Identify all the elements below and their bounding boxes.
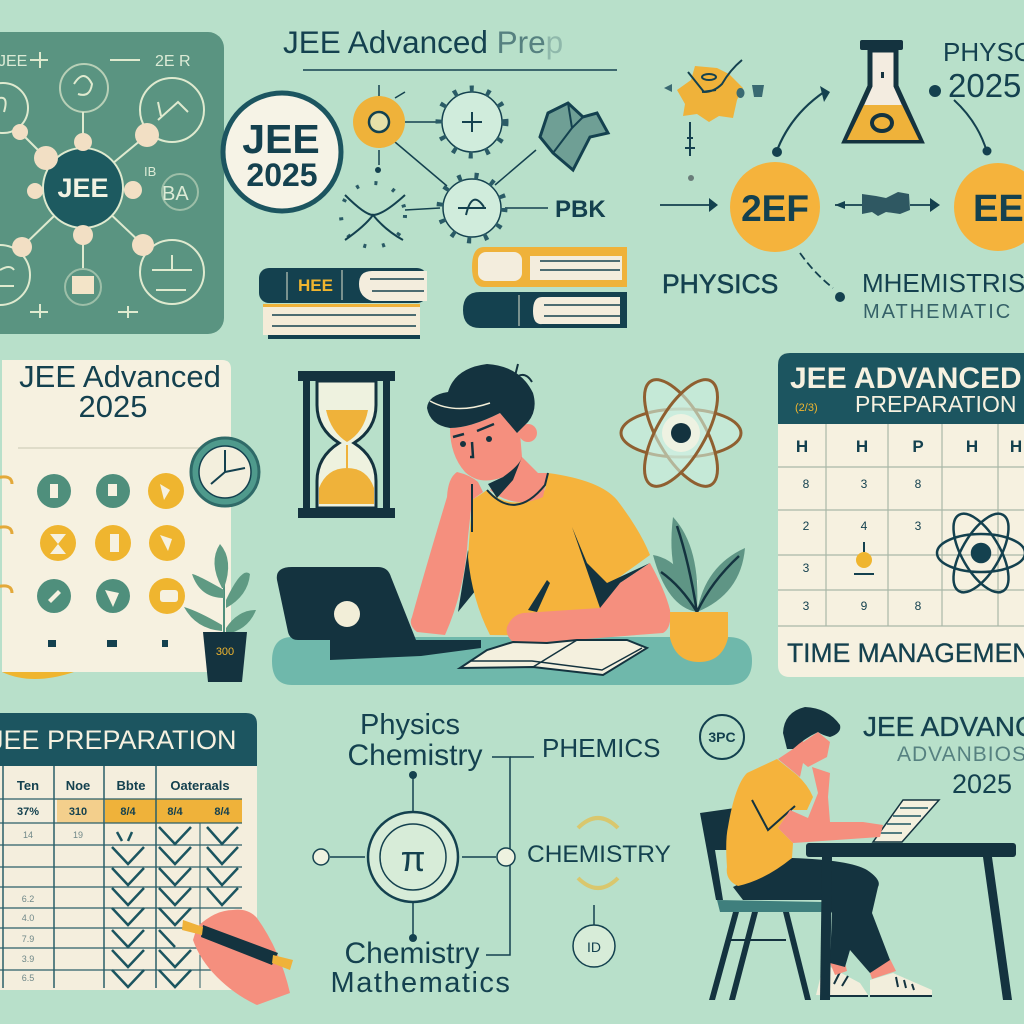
text: Physics Chemistry heading <box>347 709 483 772</box>
labels: subject branches <box>527 733 671 967</box>
node: JEE hub: JEE <box>57 173 109 203</box>
heading: JEE Advanced Preparation: JEE Advanced Prep <box>283 24 563 60</box>
panel: JEE mind map <box>0 32 224 334</box>
shirt fold <box>572 527 650 608</box>
icon: hourglass <box>298 371 395 518</box>
panel: JEE mind map: IB <box>144 164 156 179</box>
panel: JEE preparation checklist table: 8/4 <box>167 806 184 818</box>
labels: subject branches: CHEMISTRY <box>527 841 671 868</box>
badge: small JEE stamp: 3PC <box>708 729 736 745</box>
badge: small JEE stamp <box>700 715 744 759</box>
panel: time management timetable: 4 <box>861 519 868 533</box>
panel: JEE preparation checklist table: 310 <box>69 806 87 818</box>
diagram: concept network: PBK <box>555 196 606 223</box>
torso <box>468 473 650 636</box>
icon: clock <box>191 438 259 506</box>
panel: time management timetable: 3 <box>861 477 868 491</box>
panel: JEE preparation checklist table: 8/4 <box>120 806 137 818</box>
panel: JEE preparation checklist table: 3.9 <box>22 954 34 964</box>
icon: flask <box>845 40 921 141</box>
illustration: student at table <box>700 707 1016 1000</box>
icon: small plant <box>184 544 256 682</box>
panel: time management timetable: (2/3) <box>795 402 818 414</box>
panel: JEE preparation checklist table <box>0 713 257 990</box>
icon: atom <box>621 369 741 497</box>
icon: small plant: 300 <box>216 646 234 658</box>
panel: JEE preparation checklist table: Bbte <box>117 778 145 793</box>
panel: JEE preparation checklist table: 19 <box>73 830 83 840</box>
icon: left book stack: HEE <box>298 276 333 295</box>
badge: JEE 2025: JEE <box>242 116 320 162</box>
panel: time management timetable: 8 <box>915 477 922 491</box>
text: Physics 2025: 2025 <box>948 67 1021 104</box>
chair <box>700 808 823 1000</box>
dark shadow behind arm <box>458 550 476 612</box>
plant in pot <box>653 517 745 662</box>
panel: JEE preparation checklist table: 4.0 <box>22 913 34 923</box>
panel: JEE preparation checklist table: 37% <box>17 806 39 818</box>
text: Chemistry Mathematics <box>331 937 511 999</box>
badge: JEE 2025: 2025 <box>246 157 318 193</box>
flow: JEE subject nodes <box>660 86 1024 302</box>
panel: calendar JEE Advanced 2025 <box>0 359 231 679</box>
panel: time management timetable: JEE ADVANCED <box>790 362 1022 395</box>
panel: JEE preparation checklist table: Noe <box>66 778 90 793</box>
panel: calendar JEE Advanced 2025: 2025 <box>79 389 147 424</box>
panel: JEE preparation checklist table: 7.9 <box>22 934 34 944</box>
diagram: pi subject circle <box>313 757 534 955</box>
panel: time management timetable: 2 <box>803 519 810 533</box>
panel: time management timetable: 9 <box>861 599 868 613</box>
badge: JEE 2025 <box>223 93 341 211</box>
panel: time management timetable: H <box>796 437 808 456</box>
panel: JEE preparation checklist table: 6.2 <box>22 894 34 904</box>
face <box>450 413 522 481</box>
labels: physics, chemistry, mathematics <box>662 268 1024 323</box>
diagram: pi subject circle: π <box>401 838 425 879</box>
table <box>806 843 1016 1000</box>
text: Physics Chemistry heading: Physics <box>360 709 460 741</box>
labels: physics, chemistry, mathematics: MATHEMATIC <box>863 301 1012 323</box>
pen <box>528 580 550 612</box>
text: JEE Advanced 2025 right: 2025 <box>952 769 1012 799</box>
flow: JEE subject nodes: 2EF <box>741 188 809 229</box>
panel: time management timetable: 3 <box>803 599 810 613</box>
panel: JEE preparation checklist table: 6.5 <box>22 973 34 983</box>
paper <box>873 800 939 842</box>
shoes <box>816 959 932 997</box>
panel: JEE preparation checklist table: 14 <box>23 830 33 840</box>
node: JEE hub <box>43 148 123 228</box>
open notebook <box>460 640 647 675</box>
torso <box>726 759 813 886</box>
panel: time management timetable: H <box>1010 437 1022 456</box>
laptop <box>277 567 481 660</box>
arm <box>778 767 883 843</box>
icon: gold atom flower <box>664 60 764 181</box>
panel: JEE preparation checklist table: Oateraals <box>170 778 230 793</box>
panel: time management timetable <box>778 353 1024 677</box>
icon: atom timetable <box>937 505 1024 601</box>
hair <box>427 364 535 433</box>
text: Physics Chemistry heading: Chemistry <box>347 739 483 772</box>
icon: right book stack <box>463 247 627 328</box>
panel: JEE preparation checklist table: Ten <box>17 778 39 793</box>
icon: hand writing with pen <box>182 910 293 1005</box>
legs <box>733 858 890 973</box>
panel: time management timetable: 3 <box>915 519 922 533</box>
panel: time management timetable: H <box>856 437 868 456</box>
panel: time management timetable: P <box>912 437 924 456</box>
panel: time management timetable: 8 <box>915 599 922 613</box>
panel: JEE mind map: 2E R <box>155 53 191 70</box>
labels: subject branches: ID <box>587 939 601 955</box>
text: Chemistry Mathematics: Chemistry <box>344 937 480 970</box>
hair <box>783 707 840 749</box>
illustration: student at desk with laptop <box>272 364 752 685</box>
facial features <box>453 424 494 457</box>
face and neck <box>778 732 830 777</box>
panel: time management timetable: H <box>966 437 978 456</box>
icon: left book stack <box>259 268 427 339</box>
text: JEE Advanced 2025 right: ADVANBIOS <box>897 743 1024 766</box>
diagram: concept network <box>341 85 608 247</box>
left arm <box>411 472 483 635</box>
labels: subject branches: PHEMICS <box>542 733 660 763</box>
text: JEE Advanced 2025 right <box>863 711 1024 799</box>
right arm <box>507 563 670 644</box>
labels: physics, chemistry, mathematics: MHEMISTRIS <box>862 268 1024 298</box>
flow: JEE subject nodes: EE <box>973 188 1024 230</box>
panel: JEE preparation checklist table: 8/4 <box>214 806 231 818</box>
labels: physics, chemistry, mathematics: PHYSICS <box>662 269 778 299</box>
panel: calendar JEE Advanced 2025: JEE Advanced <box>19 359 221 394</box>
panel: JEE mind map: BA <box>162 183 189 205</box>
panel: time management timetable: PREPARATION <box>855 391 1016 417</box>
text: Physics 2025 <box>929 37 1024 104</box>
panel: time management timetable: 8 <box>803 477 810 491</box>
text: Chemistry Mathematics: Mathematics <box>331 967 511 999</box>
neck <box>490 457 548 502</box>
desk <box>272 637 752 685</box>
panel: time management timetable: 3 <box>803 561 810 575</box>
